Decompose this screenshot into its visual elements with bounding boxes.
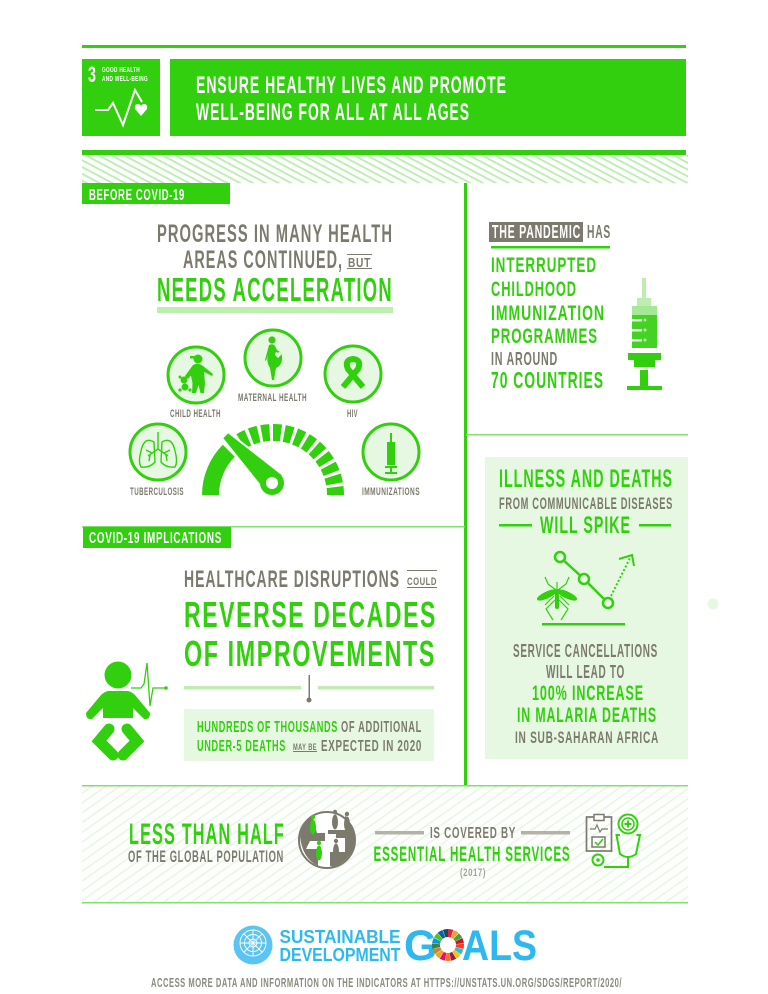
section label: covid-19 implications <box>83 527 231 548</box>
callout: under-5 deaths: OF ADDITIONAL <box>341 719 422 736</box>
text block: malaria deaths: WILL LEAD TO <box>546 662 625 682</box>
heading: reverse decades <box>184 567 437 674</box>
panel: before covid-19 <box>82 183 420 498</box>
text block: less than half: OF THE GLOBAL POPULATION <box>128 848 284 866</box>
text block: malaria deaths: SERVICE CANCELLATIONS <box>513 641 658 661</box>
callout: under-5 deaths: MAY BE <box>293 742 317 752</box>
goal 3 tile: 3 <box>88 62 97 87</box>
text block: interrupted immunization: 70 COUNTRIES <box>491 367 604 393</box>
goal 3 tile: GOOD HEALTH <box>102 67 140 74</box>
logo: sustainable development goals: SUSTAINABLE <box>280 927 400 947</box>
text block: less than half: LESS THAN HALF <box>129 818 285 851</box>
panel: pandemic immunization <box>489 222 662 393</box>
label: maternal health: MATERNAL HEALTH <box>238 392 307 404</box>
heading: reverse decades: OF IMPROVEMENTS <box>184 633 436 674</box>
heading: reverse decades: REVERSE DECADES <box>184 594 437 635</box>
text block: interrupted immunization: INTERRUPTED <box>491 252 597 277</box>
logo: sustainable development goals <box>234 922 537 970</box>
title banner: WELL-BEING FOR ALL AT ALL AGES <box>196 99 470 126</box>
icon: un emblem <box>234 926 272 964</box>
label: tuberculosis: TUBERCULOSIS <box>130 486 184 498</box>
callout: under-5 deaths: UNDER-5 DEATHS <box>197 738 286 755</box>
callout: under-5 deaths <box>184 709 434 761</box>
panel: covid-19 implications <box>83 527 437 761</box>
text block: malaria deaths <box>513 641 659 747</box>
heading: the pandemic has: THE PANDEMIC <box>492 222 581 242</box>
icon: immunizations syringe <box>363 424 419 480</box>
callout: under-5 deaths: EXPECTED IN 2020 <box>321 738 422 755</box>
title banner: ENSURE HEALTHY LIVES AND PROMOTE <box>196 72 507 99</box>
text block: interrupted immunization: IMMUNIZATION <box>491 300 605 325</box>
panel: essential health services <box>82 785 688 904</box>
section label: before covid-19: BEFORE COVID-19 <box>89 187 185 204</box>
heading: progress: NEEDS ACCELERATION <box>157 272 393 309</box>
label: immunizations: IMMUNIZATIONS <box>362 486 420 498</box>
icon: mosquito <box>536 577 578 620</box>
title banner <box>170 59 686 136</box>
divider with marker <box>184 675 434 702</box>
icon: maternal health <box>245 330 301 386</box>
logo: sustainable development goals: DEVELOPMENT <box>280 945 401 965</box>
text block: less than half <box>128 818 285 866</box>
heading: reverse decades: COULD <box>407 576 437 588</box>
heading: progress: PROGRESS IN MANY HEALTH <box>157 220 393 248</box>
icon: clipboard and stethoscope <box>586 814 640 867</box>
goal 3 tile <box>82 59 160 136</box>
text block: covered by essential health services <box>374 825 570 879</box>
text block: interrupted immunization: PROGRAMMES <box>491 323 598 348</box>
goal 3 tile: AND WELL-BEING <box>102 76 148 83</box>
heading: progress: BUT <box>348 255 371 270</box>
logo: sustainable development goals: G <box>404 922 437 970</box>
heading: will spike: WILL SPIKE <box>540 513 631 539</box>
callout: under-5 deaths: HUNDREDS OF THOUSANDS <box>197 719 338 736</box>
heading: progress <box>157 220 393 313</box>
section label: covid-19 implications: COVID-19 IMPLICATIONS <box>89 530 222 547</box>
icon: globe with people <box>299 810 355 868</box>
icon: syringe <box>627 278 662 390</box>
icon: baby with heartbeat <box>86 662 168 755</box>
panel: illness and deaths <box>485 457 688 759</box>
gauge chart <box>202 432 336 495</box>
heading: progress: AREAS CONTINUED, <box>183 246 343 274</box>
text block: interrupted immunization: IN AROUND <box>491 349 558 369</box>
heading: the pandemic has <box>489 222 611 248</box>
text block: covered by essential health services: IS COVERED BY <box>430 825 516 842</box>
label: hiv: HIV <box>347 408 358 420</box>
icon: rising trend line <box>542 552 634 626</box>
icon: tuberculosis lungs <box>130 424 186 480</box>
icon: child health <box>168 347 224 403</box>
text block: covered by essential health services: (2017) <box>460 867 486 879</box>
icon: hiv ribbon <box>325 346 381 402</box>
text block: malaria deaths: IN MALARIA DEATHS <box>517 704 657 727</box>
label: child health: CHILD HEALTH <box>170 408 221 420</box>
text block: interrupted immunization: CHILDHOOD <box>491 276 577 301</box>
heading: the pandemic has: HAS <box>587 222 611 242</box>
text block: malaria deaths: IN SUB-SAHARAN AFRICA <box>515 728 659 747</box>
text block: covered by essential health services: ESSENTIAL HEALTH SERVICES <box>374 843 570 866</box>
heading: reverse decades: HEALTHCARE DISRUPTIONS <box>184 567 400 593</box>
logo: sustainable development goals: ALS <box>462 922 537 970</box>
text block: malaria deaths: 100% INCREASE <box>532 682 644 705</box>
text block: interrupted immunization <box>491 252 605 393</box>
icon: sdg colour wheel <box>436 933 460 957</box>
